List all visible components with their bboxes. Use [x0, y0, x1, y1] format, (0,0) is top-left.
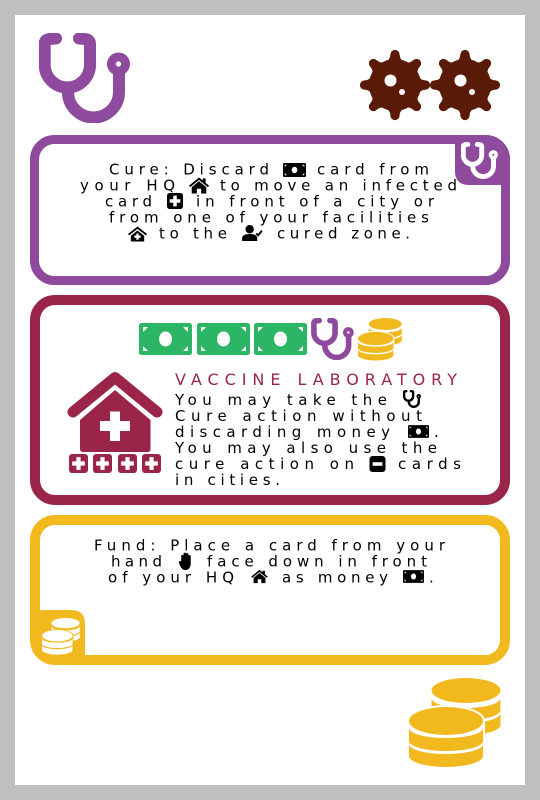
cure action text: cured zone. [277, 224, 410, 242]
laboratory rule text: You may also use the [174, 439, 437, 457]
panel: vaccine laboratory [35, 300, 505, 500]
cure action text [80, 160, 457, 242]
icon: two virus particles [360, 50, 500, 120]
cure action text: in front of a city or [196, 192, 435, 210]
fund action text [94, 536, 446, 586]
tab with stethoscope icon [455, 135, 510, 185]
cure action text: card [105, 192, 152, 210]
laboratory rule text: cure action on [175, 455, 354, 473]
fund action text: hand [111, 552, 162, 570]
cure action text: to the [159, 224, 227, 242]
icon: laboratory house with crosses [69, 378, 161, 473]
panel: fund action [30, 520, 505, 660]
icon: large stethoscope [45, 38, 130, 118]
laboratory rule text: cards [398, 455, 461, 473]
cure action text: card from [317, 160, 429, 178]
cure action text: your HQ [80, 176, 175, 194]
laboratory rule text: You may take the [174, 391, 387, 409]
fund action text: face down in front [207, 552, 427, 570]
laboratory rule text: discarding money [175, 423, 390, 441]
laboratory rule text [174, 391, 461, 489]
cost row: money, stethoscope, coins [139, 318, 402, 361]
fund action text: . [429, 568, 434, 586]
fund action text: Fund: Place a card from your [94, 536, 446, 554]
cure action text: to move an infected [220, 176, 457, 194]
fund action text: of your HQ [108, 568, 234, 586]
fund action text: as money [282, 568, 388, 586]
icon: large gold coins [407, 678, 500, 768]
laboratory rule text: in cities. [175, 471, 280, 489]
cure action text: Cure: Discard [109, 160, 269, 178]
laboratory rule text: . [434, 423, 439, 441]
tab with coins icon [30, 610, 85, 660]
laboratory rule text: Cure action without [175, 407, 422, 425]
heading: vaccine laboratory: VACCINE LABORATORY [175, 370, 457, 389]
panel: cure action [34, 135, 510, 280]
cure action text: from one of your facilities [109, 208, 429, 226]
